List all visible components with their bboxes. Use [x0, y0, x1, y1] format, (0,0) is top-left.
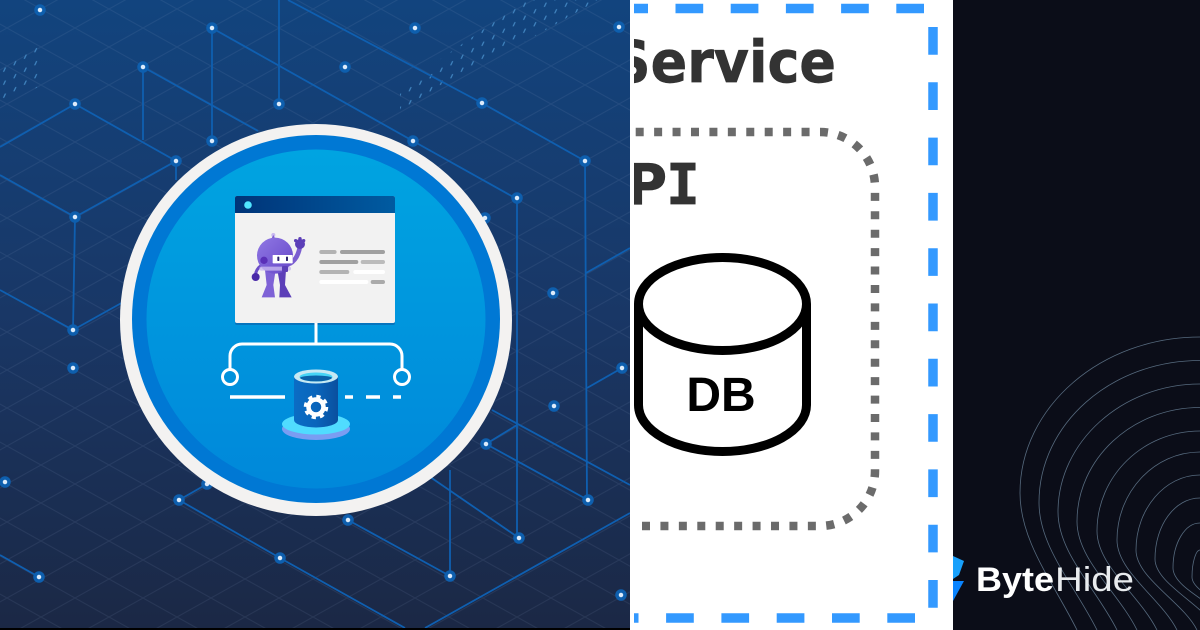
icon: DB cylinder: DB [686, 369, 756, 422]
icon: robot mascot [252, 233, 305, 297]
concentric wave lines [1020, 337, 1200, 630]
panel: ByteHide brand [953, 0, 1200, 630]
icon: DB cylinder [638, 258, 806, 452]
text placeholder bars [319, 250, 385, 284]
icon: ByteHide bolt [953, 556, 964, 601]
logo wordmark: Hide [1055, 561, 1134, 599]
app window [235, 196, 395, 325]
heading: API [634, 162, 696, 205]
connector lines [222, 323, 410, 397]
dotted API boundary [634, 132, 875, 526]
icon: database with gear [282, 370, 350, 440]
panel: network background [0, 0, 630, 628]
heading: Service: Service [612, 29, 836, 96]
dashed service boundary [630, 8, 933, 618]
badge: circular illustration [120, 124, 512, 516]
logo wordmark: Byte [976, 561, 1054, 599]
logo wordmark [976, 561, 1134, 599]
network nodes [1, 6, 626, 599]
icon: gear [306, 396, 326, 418]
circuit lines [0, 0, 630, 628]
heading: API: I [666, 153, 700, 218]
heading: API: P [626, 153, 667, 218]
panel: architecture diagram crop [630, 0, 953, 630]
